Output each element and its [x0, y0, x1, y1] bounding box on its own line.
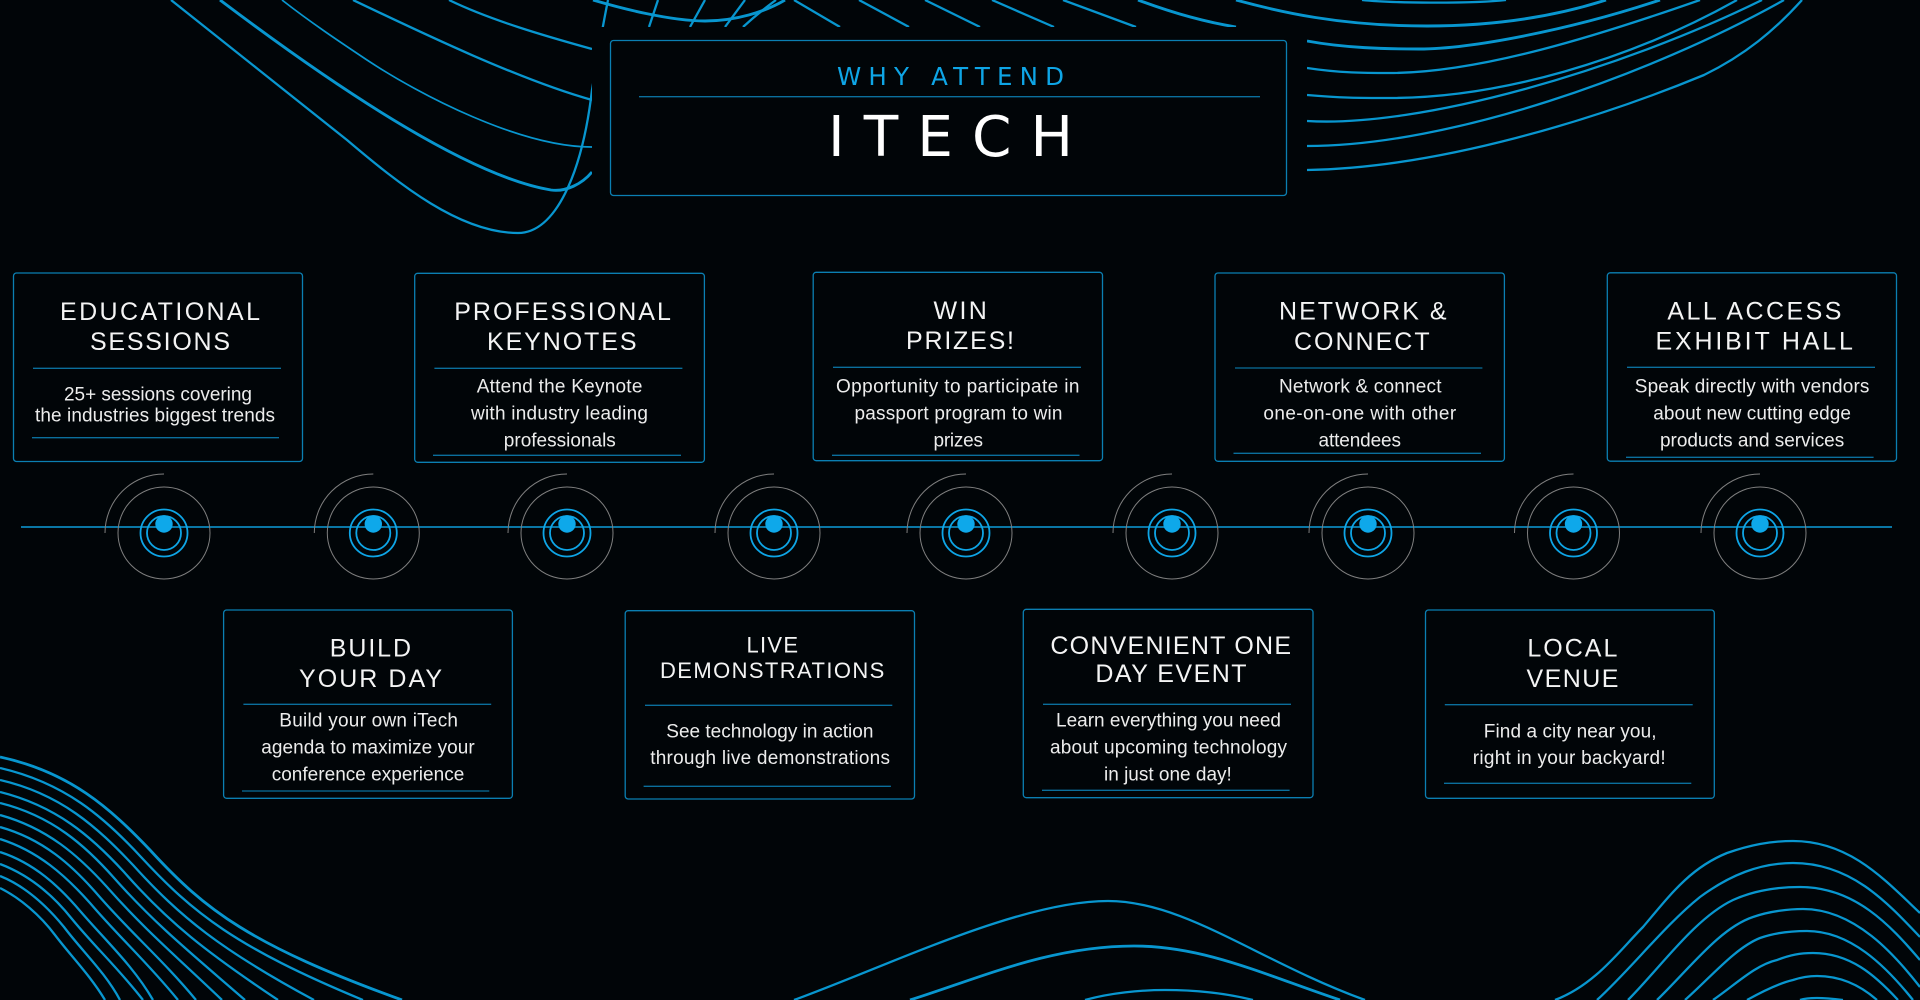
panel: network and connect: [1215, 273, 1504, 461]
node 1: [105, 474, 210, 579]
panel: educational sessions: SESSIONS: [90, 328, 230, 356]
panel: network and connect: one-on-one with other: [1263, 404, 1457, 425]
panel: educational sessions: EDUCATIONAL: [60, 298, 260, 326]
eyebrow: why attend: WHY ATTEND: [837, 62, 1064, 91]
panel: all access exhibit hall: ALL ACCESS: [1667, 297, 1841, 325]
panel: professional keynotes: KEYNOTES: [487, 328, 636, 356]
decorative waves: bottom left: [0, 757, 402, 1000]
timeline: [21, 474, 1892, 579]
panel: all access exhibit hall: Speak directly with vendors: [1635, 376, 1869, 397]
timeline line: [21, 526, 1892, 528]
panel: all access exhibit hall: about new cutting edge: [1653, 404, 1851, 425]
panel: build your day: BUILD: [330, 635, 411, 663]
panel: network and connect: CONNECT: [1294, 328, 1430, 356]
panel: educational sessions: the industries biggest trends: [35, 406, 275, 427]
decorative waves: top right: [1236, 0, 1802, 170]
node 7: [1309, 474, 1414, 579]
panel: network and connect: Network & connect: [1279, 376, 1442, 397]
panel: educational sessions: 25+ sessions covering: [64, 385, 252, 406]
panel: build your day: Build your own iTech: [279, 710, 458, 731]
panel: convenient one day event: Learn everything you need: [1056, 711, 1281, 732]
node 6: [1113, 474, 1218, 579]
panel: win prizes: [813, 272, 1102, 461]
panel: live demonstrations: DEMONSTRATIONS: [660, 658, 884, 683]
node 3: [508, 474, 613, 579]
panel: live demonstrations: [625, 611, 914, 799]
panel: professional keynotes: Attend the Keynote: [477, 376, 642, 397]
panel: win prizes: Opportunity to participate in: [836, 376, 1080, 397]
panel: title box: [610, 40, 1286, 196]
panel: educational sessions: [14, 273, 302, 462]
panel: build your day: YOUR DAY: [299, 665, 442, 693]
panel: live demonstrations: through live demonstrations: [650, 748, 890, 769]
header mask: [592, 27, 1307, 237]
panel: professional keynotes: with industry leading: [470, 404, 648, 425]
node 8: [1514, 474, 1620, 579]
panel: convenient one day event: in just one day!: [1104, 765, 1232, 786]
panel: convenient one day event: DAY EVENT: [1095, 660, 1246, 688]
panel: local venue: right in your backyard!: [1473, 748, 1666, 769]
decorative waves: bottom right: [1555, 841, 1920, 1000]
panel: convenient one day event: about upcoming technology: [1050, 738, 1288, 759]
panel: convenient one day event: CONVENIENT ONE: [1050, 632, 1291, 660]
decorative waves: bottom centre: [794, 901, 1365, 1000]
panel: local venue: VENUE: [1526, 665, 1618, 693]
panel: all access exhibit hall: EXHIBIT HALL: [1656, 327, 1853, 355]
panel: win prizes: WIN: [934, 297, 987, 325]
panel: all access exhibit hall: products and services: [1660, 430, 1844, 451]
node 4: [715, 474, 820, 579]
panel: professional keynotes: [415, 273, 704, 462]
panel: live demonstrations: LIVE: [746, 633, 798, 658]
panel: win prizes: passport program to win: [854, 404, 1062, 425]
panel: network and connect: NETWORK &: [1279, 297, 1447, 325]
panel: build your day: [224, 610, 512, 798]
node 2: [314, 474, 419, 579]
panel: local venue: LOCAL: [1527, 635, 1617, 663]
decorative waves: top centre: [593, 0, 1236, 27]
panel: convenient one day event: [1023, 609, 1313, 798]
panel: build your day: agenda to maximize your: [261, 738, 475, 759]
panel: network and connect: attendees: [1318, 430, 1401, 451]
decorative waves: top left: [171, 0, 608, 233]
panel: local venue: [1426, 610, 1714, 798]
panel: win prizes: prizes: [934, 430, 983, 451]
panel: all access exhibit hall: [1607, 273, 1896, 461]
title: itech: ITECH: [828, 105, 1073, 170]
panel: professional keynotes: professionals: [504, 430, 616, 451]
node 5: [907, 474, 1012, 579]
node 9: [1701, 474, 1806, 579]
panel: live demonstrations: See technology in action: [666, 721, 873, 742]
panel: professional keynotes: PROFESSIONAL: [454, 298, 671, 326]
panel: win prizes: PRIZES!: [906, 327, 1014, 355]
panel: local venue: Find a city near you,: [1484, 721, 1656, 742]
panel: build your day: conference experience: [272, 765, 464, 786]
